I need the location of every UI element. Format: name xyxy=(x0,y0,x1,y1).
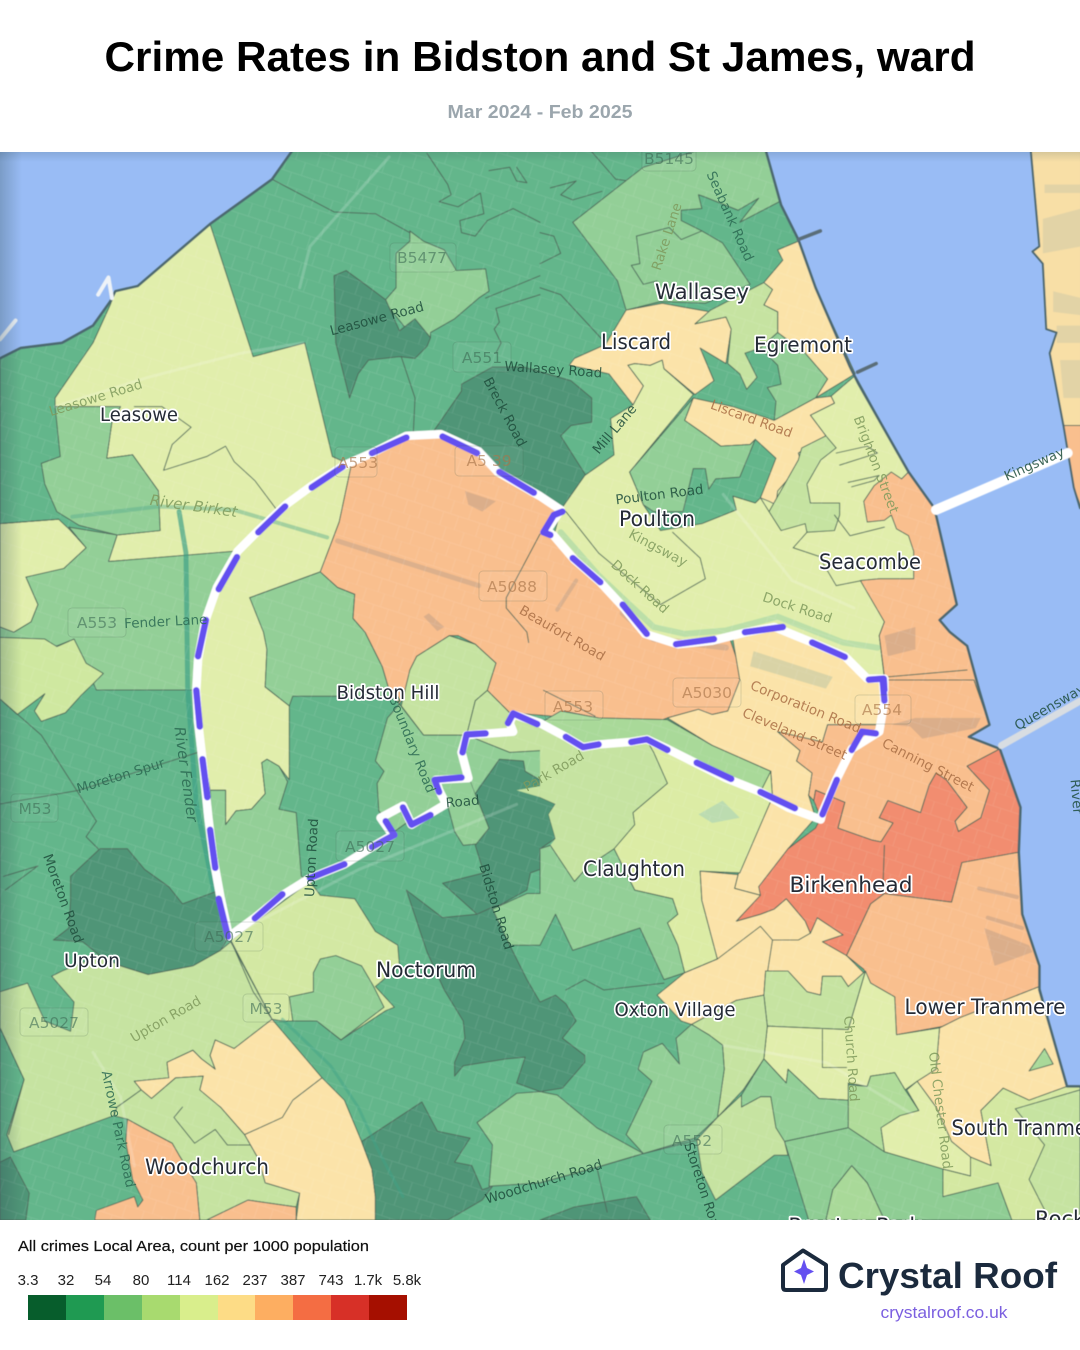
Oxton lime xyxy=(692,995,767,1117)
Storeton light green xyxy=(741,1059,850,1142)
place label: Upton: Upton xyxy=(64,950,120,972)
road and river labels: River Birket xyxy=(149,491,240,521)
Woodchurch lime xyxy=(114,1076,300,1220)
road and river labels: Bidston Road xyxy=(475,862,516,952)
ward outline: purple dashes xyxy=(196,437,884,937)
place label: Seacombe: Seacombe xyxy=(819,550,921,574)
Boundary Road light green xyxy=(375,704,489,845)
road number shields: A5030 xyxy=(682,684,732,702)
place label: Wallasey: Wallasey xyxy=(655,280,749,304)
Birkenhead north orange xyxy=(778,680,1000,842)
Bidston orange ward xyxy=(320,434,741,728)
road and river labels: Church Road xyxy=(840,1015,862,1102)
Claughton park yellow xyxy=(614,740,772,973)
map edge shading xyxy=(0,152,22,1220)
Woodchurch cream xyxy=(134,1019,375,1220)
Noctorum yellow lime xyxy=(231,882,400,1040)
Seacombe orange xyxy=(860,472,979,690)
River Birket xyxy=(72,506,327,537)
brand name: Crystal Roof xyxy=(838,1255,1058,1296)
Liverpool bank xyxy=(1031,150,1080,426)
Woodchurch orange xyxy=(95,1119,200,1220)
west yellow xyxy=(0,519,86,632)
Oxton light green xyxy=(626,1024,724,1154)
road number shields: A5088 xyxy=(487,578,537,596)
road and river labels: Kingsway xyxy=(626,526,690,571)
Corporation Road cream xyxy=(667,627,884,895)
Poulton light green xyxy=(630,398,755,512)
place label: Liscard: Liscard xyxy=(601,330,671,354)
road number shields: M53 xyxy=(249,1000,283,1018)
Bidston Road dark strip xyxy=(443,759,556,914)
place label: Birkenhead: Birkenhead xyxy=(790,873,912,897)
Church Road lime xyxy=(764,971,865,1030)
Noctorum dark strip xyxy=(406,890,585,1092)
Egremont light green xyxy=(760,333,828,420)
title: Crime Rates in Bidston and St James, ward xyxy=(104,33,976,80)
place label: Prenton Park: Prenton Park xyxy=(788,1214,922,1238)
Egremont cream xyxy=(764,241,855,398)
road number shields: B5145 xyxy=(644,150,694,168)
road and river labels: Brighton Street xyxy=(850,414,902,516)
legend scale values: 3.3 xyxy=(18,1272,38,1289)
legend scale values: 1.7k xyxy=(354,1272,383,1289)
Storeton lime xyxy=(697,1095,788,1200)
west light green xyxy=(0,527,234,690)
pale strip north of ward xyxy=(561,532,878,648)
legend scale values: 743 xyxy=(318,1272,344,1289)
road and river labels: Moreton Road xyxy=(39,852,86,945)
ward outline: white casing xyxy=(196,434,884,937)
road and river labels: Boundary Road xyxy=(385,694,438,795)
place label: Woodchurch: Woodchurch xyxy=(145,1155,269,1179)
pale main roads xyxy=(55,157,913,1166)
Leasowe yellow area xyxy=(55,224,351,825)
road number shields: A5 39 xyxy=(466,452,512,470)
orange internal features xyxy=(465,491,496,512)
south-west dark patch xyxy=(0,1157,29,1220)
Bidston Hill lime xyxy=(401,636,496,735)
road number shields: A553 xyxy=(77,614,117,632)
place label: Poulton: Poulton xyxy=(619,507,695,531)
land base xyxy=(0,150,1080,1225)
road and river labels: Woodchurch Road xyxy=(483,1157,604,1208)
place label: Oxton Village: Oxton Village xyxy=(614,999,736,1021)
road number shields xyxy=(11,147,911,1154)
road and river labels: Canning Street xyxy=(879,735,976,795)
road number shields: A551 xyxy=(462,349,502,367)
road and river labels: Wallasey Road xyxy=(504,359,603,381)
road and river labels: Fender Lane xyxy=(124,612,208,632)
Liscard Road cream xyxy=(685,396,834,505)
brand URL: crystalroof.co.uk xyxy=(880,1304,1008,1322)
road number shields: A553 xyxy=(338,454,378,472)
place label: Noctorum: Noctorum xyxy=(376,958,476,982)
place label: Claughton: Claughton xyxy=(583,857,685,881)
Church Road yellow xyxy=(764,971,940,1100)
Leasowe boundary lines xyxy=(134,407,276,508)
road and river labels: Arrowe Park Road xyxy=(98,1069,138,1189)
panel: legend xyxy=(18,1238,422,1320)
Birkenhead red xyxy=(736,749,1020,956)
road and river labels: Upton Road xyxy=(128,993,204,1046)
road and river labels: Beaufort Road xyxy=(516,603,608,665)
top light green xyxy=(573,150,779,310)
Liscard cream xyxy=(569,303,731,405)
M53 river line xyxy=(282,1019,403,1197)
legend scale values: 237 xyxy=(242,1272,268,1289)
bridge: Queensway xyxy=(1002,701,1080,745)
Noctorum light green xyxy=(289,956,384,1040)
Wallasey lime xyxy=(695,283,778,389)
north boundary lines xyxy=(427,153,540,236)
legend scale values: 387 xyxy=(280,1272,306,1289)
road and river labels: Old Chester Road xyxy=(925,1051,955,1170)
subtitle: date range: Mar 2024 - Feb 2025 xyxy=(448,102,632,122)
dark Leasowe Road patch xyxy=(334,271,431,398)
road and river labels: Road xyxy=(445,793,480,811)
legend scale values: 32 xyxy=(58,1272,74,1289)
Park strip north xyxy=(477,720,540,752)
Upton lime xyxy=(0,942,272,1152)
road number shields: A5027 xyxy=(204,928,254,946)
road and river labels: Poulton Road xyxy=(615,482,704,508)
bottom dark patch xyxy=(540,1197,650,1220)
top centre light green xyxy=(384,231,489,338)
west boundary lines xyxy=(0,699,98,849)
road number shields: B5477 xyxy=(397,249,447,267)
water xyxy=(0,152,1080,1086)
legend scale values xyxy=(18,1272,422,1289)
south-west quadrant areas xyxy=(0,690,643,1220)
street texture xyxy=(0,150,1080,1225)
South Tranmere cream xyxy=(917,987,1067,1166)
road and river labels: Dock Road xyxy=(760,589,834,627)
south-east quadrant areas xyxy=(492,627,1080,1220)
road and river labels: Rake Lane xyxy=(649,201,686,273)
place label: Leasowe: Leasowe xyxy=(100,404,178,426)
road number shields: A554 xyxy=(862,701,902,719)
Claughton light green xyxy=(492,845,685,980)
road and river labels: Storeton Road xyxy=(680,1141,725,1237)
road and river labels: River Fender xyxy=(170,726,202,824)
Poulton and Seacombe yellow xyxy=(554,360,919,679)
road number shields: A5027 xyxy=(29,1014,79,1032)
road and river labels: Moreton Spur xyxy=(75,755,167,797)
road number shields: A552 xyxy=(672,1132,712,1150)
legend scale values: 80 xyxy=(133,1272,149,1289)
road and river labels: Corporation Road xyxy=(748,678,863,737)
Poulton boundary lines xyxy=(566,512,705,605)
Oxton cream xyxy=(657,871,867,1024)
north-east quadrant areas xyxy=(554,150,979,690)
legend scale values: 114 xyxy=(167,1272,191,1289)
legend scale values: 54 xyxy=(95,1272,111,1289)
Q4 right light green xyxy=(477,1092,643,1186)
legend colour bar xyxy=(28,1295,407,1320)
south dark patch xyxy=(362,1102,492,1220)
road and river labels xyxy=(39,169,1080,1237)
place label: Bidston Hill: Bidston Hill xyxy=(336,682,440,704)
road and river labels: Seabank Road xyxy=(703,169,757,264)
road and river labels: Leasowe Road xyxy=(328,299,426,339)
road and river labels: Kingsway xyxy=(1002,444,1067,485)
road and river labels: Upton Road xyxy=(302,818,322,898)
road number shields: M53 xyxy=(18,800,52,818)
park strip xyxy=(540,711,771,790)
Seacombe lime xyxy=(769,436,840,532)
road and river labels: Park Road xyxy=(521,748,587,795)
icon: house with star xyxy=(783,1250,826,1290)
legend title: All crimes Local Area, count per 1000 population xyxy=(18,1238,369,1255)
road and river labels: Mill Lane xyxy=(590,401,640,457)
place label: Egremont: Egremont xyxy=(754,333,852,357)
legend scale values: 5.8k xyxy=(393,1272,422,1289)
Bidston Hill light green xyxy=(250,572,391,706)
road number shields: A553 xyxy=(553,698,593,716)
place label: Lower Tranmere: Lower Tranmere xyxy=(904,995,1066,1019)
road number shields: A5027 xyxy=(345,838,395,856)
Rock Ferry green xyxy=(848,1073,919,1152)
inside-ward light green xyxy=(210,759,310,937)
bottom mid green boundary lines xyxy=(540,1140,698,1183)
road and river labels: Dock Road xyxy=(608,557,672,617)
Upton dark patch xyxy=(53,849,229,974)
Lower Tranmere orange xyxy=(847,852,1039,1035)
Claughton lime left xyxy=(540,723,667,882)
logo: Crystal Roof xyxy=(783,1250,1058,1322)
bridge: Kingsway xyxy=(936,453,1068,510)
dark Breck Road patch xyxy=(434,367,592,512)
road and river labels: Breck Road xyxy=(480,375,529,450)
choropleth areas xyxy=(0,150,1080,1225)
road and river labels: Liscard Road xyxy=(708,397,795,441)
coastline and piers xyxy=(0,150,293,358)
River Fender north xyxy=(179,512,215,897)
road and river labels: Leasowe Road xyxy=(47,376,144,420)
lime by the ward corner xyxy=(468,690,510,732)
road and river labels: Cleveland Street xyxy=(740,705,849,764)
legend scale values: 162 xyxy=(204,1272,230,1289)
